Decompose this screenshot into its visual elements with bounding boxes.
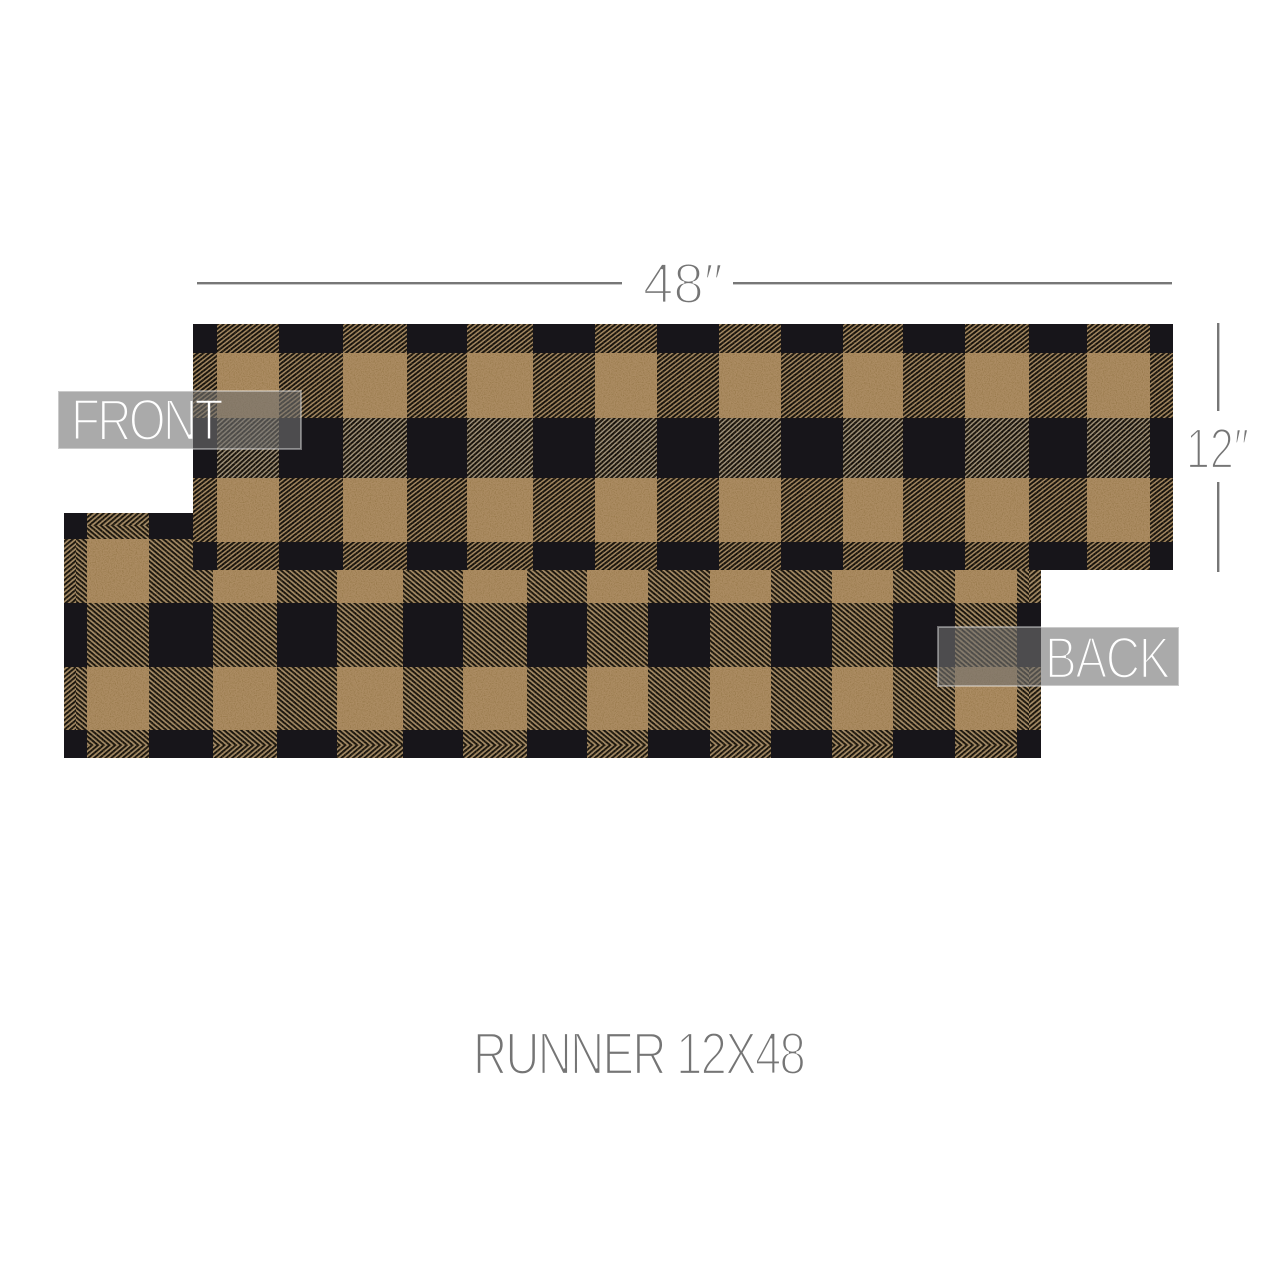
back label text: BACK <box>1045 627 1170 691</box>
back vertical stripe bands <box>64 513 1041 758</box>
height label: 12″ <box>1186 417 1249 481</box>
front middle lighter stripe band <box>193 418 1173 478</box>
width label: 48″ <box>643 252 723 316</box>
back black check squares <box>64 513 1041 758</box>
front label text: FRONT <box>71 389 224 453</box>
front horizontal stripe bands <box>193 324 1173 570</box>
front vertical stripe bands <box>193 324 1173 570</box>
front tan grain <box>193 324 1173 570</box>
width line right <box>733 282 1172 284</box>
callout: front label <box>58 389 301 453</box>
height line bottom <box>1217 482 1219 572</box>
panel: front of runner <box>193 324 1173 570</box>
back horizontal stripe bands <box>64 513 1041 758</box>
front black check squares <box>193 324 1173 570</box>
height line top <box>1217 323 1219 411</box>
product size caption: RUNNER 12X48 <box>473 1022 806 1087</box>
back tan base <box>64 513 1041 758</box>
width line left <box>197 282 622 284</box>
callout: back label <box>938 627 1179 691</box>
back label box <box>938 627 1179 686</box>
panel: back of runner <box>64 513 1041 758</box>
back tan grain <box>64 513 1041 758</box>
front label box <box>58 391 301 449</box>
front tan base <box>193 324 1173 570</box>
back hem herringbone <box>64 513 1041 758</box>
